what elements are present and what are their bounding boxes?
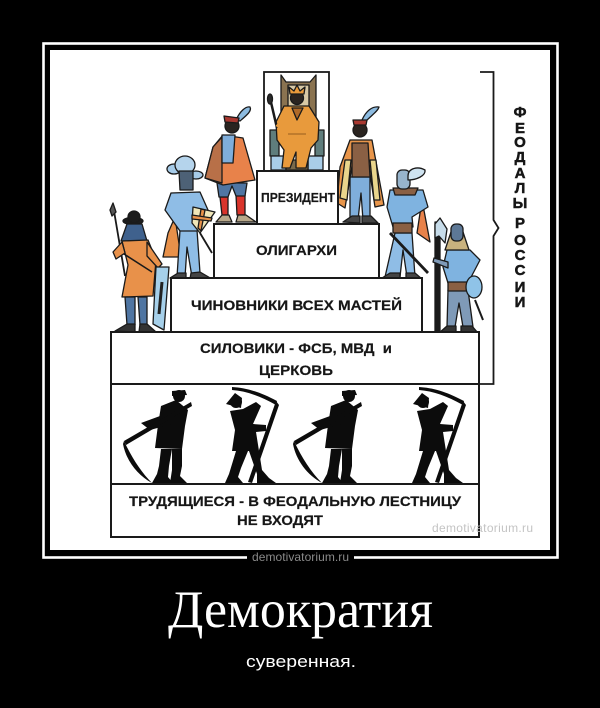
vertical label: feudal lords of Russia: А (515, 165, 526, 182)
picture panel (50, 50, 550, 550)
panel: workers (111, 384, 479, 537)
step: security forces and church: СИЛОВИКИ - ФСБ, МВД и (200, 340, 392, 356)
subtitle: суверенная. (246, 652, 356, 671)
title: Демократия (168, 581, 433, 639)
vertical label: feudal lords of Russia: Е (515, 120, 525, 137)
vertical label: feudal lords of Russia: И (515, 279, 525, 296)
vertical label: feudal lords of Russia: Ф (514, 104, 527, 121)
icon: mower with raised scythe (225, 387, 279, 483)
icon: noble with brown tunic (337, 107, 384, 223)
icon: noble in orange cape (205, 107, 256, 222)
vertical label: feudal lords of Russia: С (515, 262, 526, 279)
step: security forces and church: ЦЕРКОВЬ (259, 362, 333, 378)
vertical label: feudal lords of Russia: О (514, 134, 526, 151)
vertical label: feudal lords of Russia: Р (515, 215, 525, 232)
vertical label: feudal lords of Russia: Д (515, 149, 526, 166)
panel: workers: НЕ ВХОДЯТ (237, 512, 323, 528)
outer white frame (44, 44, 558, 558)
icon: knight with sword (382, 168, 430, 279)
bracket (479, 72, 498, 384)
vertical label: feudal lords of Russia: Ы (513, 195, 527, 212)
vertical label: feudal lords of Russia: И (515, 294, 525, 311)
step: security forces and church (111, 332, 479, 384)
icon: mower with lowered scythe (293, 390, 362, 483)
step: officials: ЧИНОВНИКИ ВСЕХ МАСТЕЙ (191, 296, 402, 313)
step: officials (171, 278, 422, 332)
step: king frame (264, 72, 329, 171)
panel: workers: ТРУДЯЩИЕСЯ - В ФЕОДАЛЬНУЮ ЛЕСТНИЦУ (129, 493, 461, 509)
vertical label: feudal lords of Russia: С (515, 247, 526, 264)
icon: mower with raised scythe (412, 387, 466, 483)
step: oligarchs: ОЛИГАРХИ (256, 242, 337, 258)
vertical label: feudal lords of Russia: О (514, 232, 526, 249)
icon: mower with lowered scythe (123, 390, 192, 483)
icon: spearman (110, 203, 169, 332)
step: oligarchs (214, 224, 379, 278)
icon: guard with halberd (433, 218, 483, 333)
icon: king on throne (268, 75, 324, 170)
vertical label: feudal lords of Russia: Л (515, 180, 525, 197)
site label on frame: demotivatorium.ru (252, 550, 349, 564)
watermark: demotivatorium.ru (432, 521, 533, 535)
vertical label: feudal lords of Russia (513, 104, 527, 311)
icon: knight with shield (163, 156, 215, 279)
step: president: ПРЕЗИДЕНТ (261, 190, 335, 205)
step: president (257, 171, 338, 224)
